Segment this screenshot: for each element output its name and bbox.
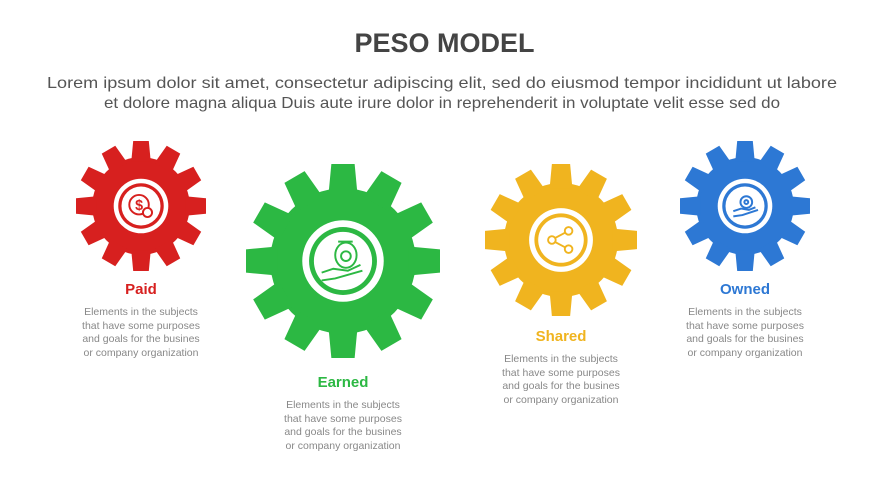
text: owned description: or company organization [688, 347, 803, 359]
subtitle: Lorem ipsum dolor sit amet, consectetur adipiscing elit, sed do eiusmod tempor incididunt ut labore [47, 75, 837, 92]
text: shared description [502, 353, 620, 406]
text: shared description: and goals for the busines [502, 380, 620, 392]
label: earned: Earned [318, 374, 368, 391]
panel: paid [76, 141, 206, 359]
text: paid description: Elements in the subjects [84, 306, 198, 318]
text: paid description: or company organization [84, 347, 199, 359]
icon: red gear: $ [135, 198, 143, 214]
text: earned description: that have some purposes [284, 413, 402, 425]
text: shared description: or company organization [504, 394, 619, 406]
text: owned description [686, 306, 804, 359]
icon: yellow gear [485, 164, 637, 316]
title: PESO MODEL [354, 28, 535, 58]
panel: owned [680, 141, 810, 359]
label: shared: Shared [536, 328, 586, 345]
text: paid description: that have some purposes [82, 320, 200, 332]
panel: shared [485, 164, 637, 406]
text: paid description: and goals for the busines [82, 333, 200, 345]
text: earned description: and goals for the busines [284, 426, 402, 438]
text: earned description: or company organization [286, 440, 401, 452]
text: shared description: that have some purposes [502, 367, 620, 379]
text: shared description: Elements in the subjects [504, 353, 618, 365]
text: owned description: and goals for the busines [686, 333, 804, 345]
text: owned description: that have some purposes [686, 320, 804, 332]
icon: blue gear [680, 141, 810, 271]
label: owned: Owned [720, 281, 770, 298]
icon: red gear [76, 141, 206, 271]
text: earned description: Elements in the subjects [286, 399, 400, 411]
subtitle: et dolore magna aliqua Duis aute irure dolor in reprehenderit in voluptate velit esse sed do [104, 95, 780, 112]
text: paid description [82, 306, 200, 359]
icon: green gear [246, 164, 440, 358]
text: earned description [284, 399, 402, 452]
panel: earned [246, 164, 440, 452]
label: paid: Paid [125, 281, 157, 298]
text: owned description: Elements in the subjects [688, 306, 802, 318]
subtitle [47, 75, 837, 112]
